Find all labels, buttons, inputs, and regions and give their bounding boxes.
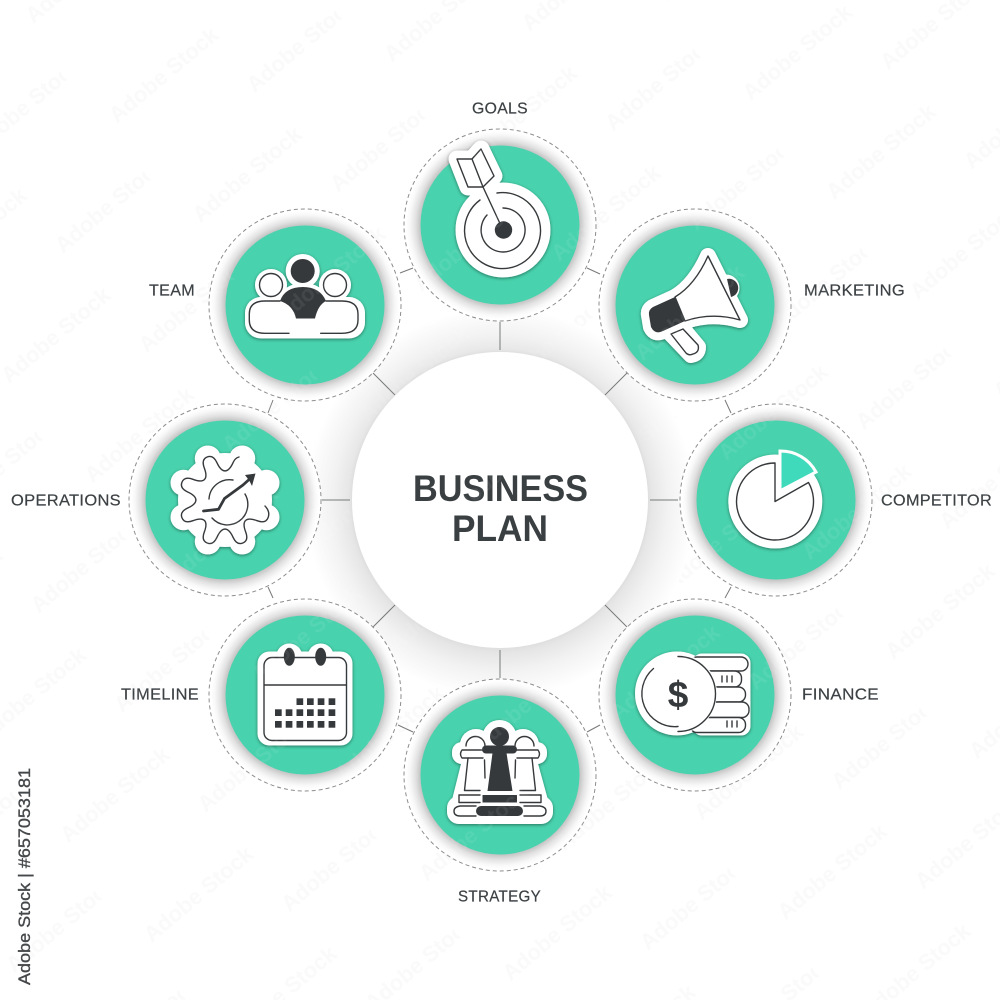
icon: chess pieces: [447, 720, 553, 824]
node: operations: [129, 404, 321, 596]
node: marketing: [599, 209, 791, 401]
node: finance: [599, 599, 791, 791]
title: PLAN: [452, 508, 548, 549]
label: finance: FINANCE: [802, 686, 879, 704]
label: competitor: COMPETITOR: [881, 492, 992, 510]
label: marketing: MARKETING: [804, 282, 905, 300]
node: strategy: [404, 679, 596, 871]
title: [413, 468, 588, 549]
title: BUSINESS: [413, 468, 588, 509]
icon: megaphone: [649, 256, 740, 355]
center circle: [352, 352, 648, 648]
stock id credit: Adobe Stock | #657053181: [15, 768, 34, 985]
node: timeline: [209, 599, 401, 791]
dollar sign: $: [668, 674, 689, 715]
icon: calendar: [258, 644, 352, 746]
label: strategy: STRATEGY: [458, 888, 541, 906]
node: team: [209, 209, 401, 401]
label: goals: GOALS: [472, 100, 528, 118]
label: operations: OPERATIONS: [11, 492, 121, 510]
links between neighbouring nodes: [268, 268, 731, 732]
icon: gear with growth arrow: [170, 446, 280, 554]
connectors from center to nodes: [322, 322, 678, 678]
icon: dollar coins: [636, 652, 749, 735]
icon: arrow in target: [456, 149, 550, 277]
center circle shadow: [305, 308, 695, 698]
icon: pie chart: [729, 451, 822, 548]
label: team: TEAM: [149, 282, 195, 300]
label: timeline: TIMELINE: [121, 686, 199, 704]
node: competitor: [680, 404, 872, 596]
node: goals: [404, 129, 596, 321]
icon: team of people: [245, 254, 365, 338]
